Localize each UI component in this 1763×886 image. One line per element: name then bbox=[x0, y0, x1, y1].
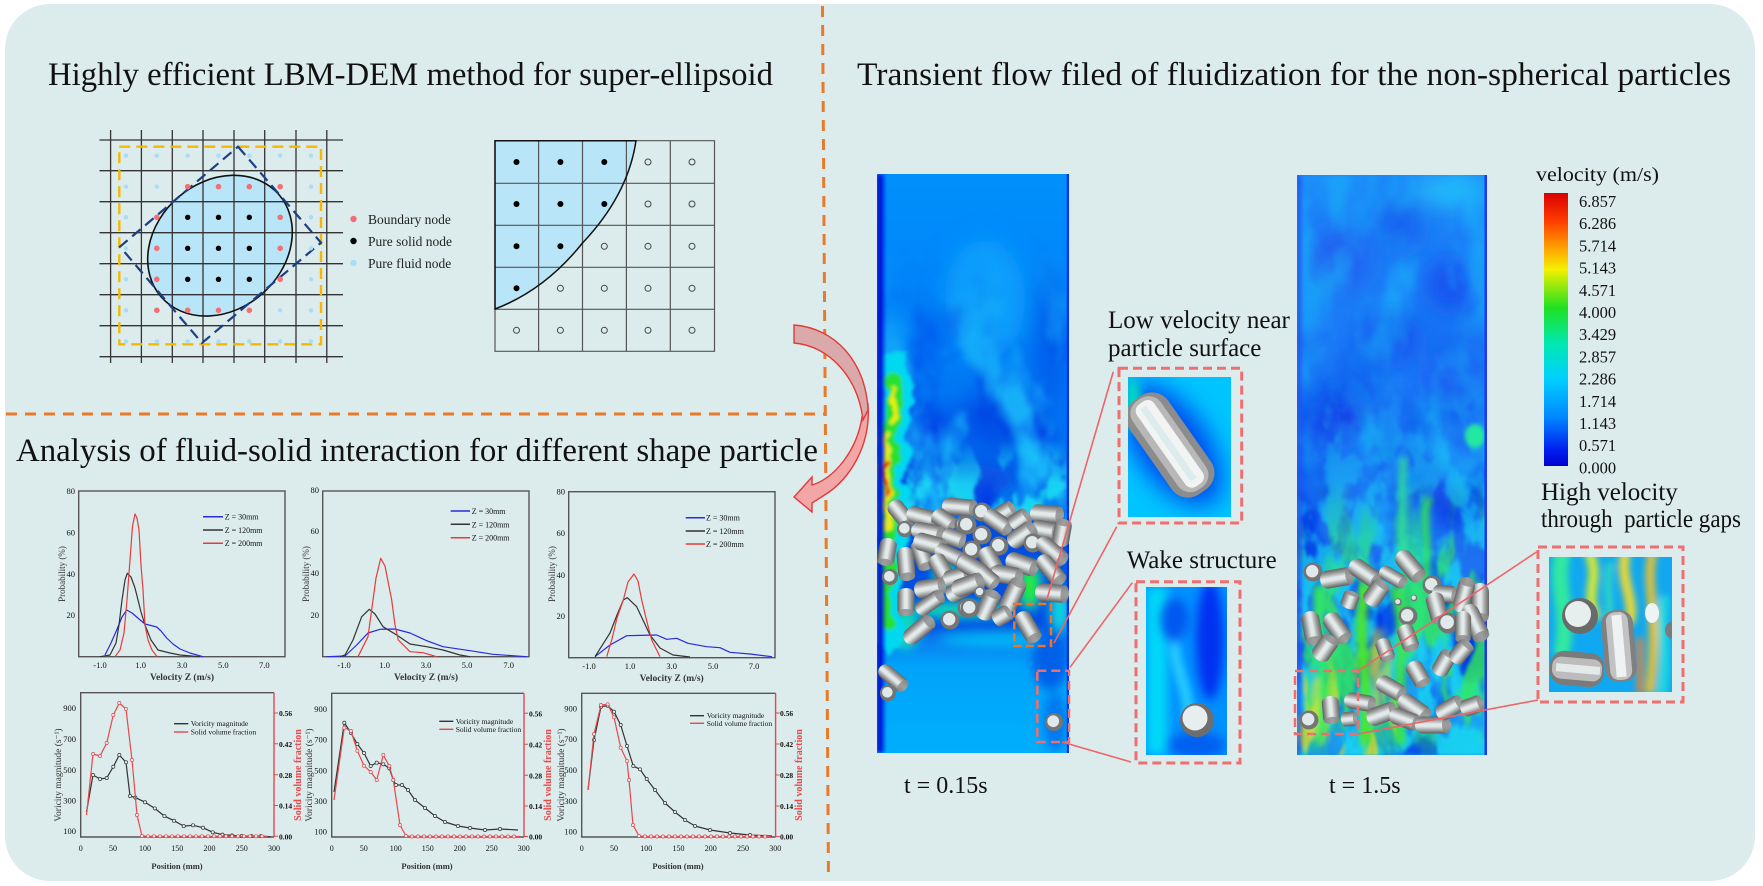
chart: vorticity and solid fraction c bbox=[556, 693, 805, 871]
title: fluid-solid analysis: Analysis of fluid-solid interaction for different shape particle bbox=[16, 433, 818, 469]
chart: vorticity and solid fraction a: 100 bbox=[63, 826, 76, 836]
colour scale: 4.000 bbox=[1579, 303, 1616, 322]
chart: vorticity and solid fraction a bbox=[53, 693, 304, 871]
chart: velocity distribution b: Z = 120mm bbox=[472, 520, 510, 530]
chart: vorticity and solid fraction a: 0.14 bbox=[279, 802, 292, 810]
chart: vorticity and solid fraction c: Solid volume fraction bbox=[707, 719, 772, 728]
colour scale: 5.714 bbox=[1579, 236, 1616, 256]
chart: velocity distribution a: Velocity Z (m/s) bbox=[150, 672, 214, 683]
chart: vorticity and solid fraction c: 150 bbox=[672, 844, 684, 853]
chart: vorticity and solid fraction b: 0 bbox=[330, 844, 334, 853]
chart: vorticity and solid fraction a: Solid volume fraction bbox=[191, 728, 256, 736]
t label left: t = 0.15s bbox=[904, 773, 988, 799]
chart: vorticity and solid fraction b: 100 bbox=[314, 826, 327, 836]
chart: vorticity and solid fraction b: 0.00 bbox=[529, 832, 542, 842]
chart: velocity distribution a: Z = 200mm bbox=[225, 539, 263, 548]
chart: vorticity and solid fraction a: 200 bbox=[204, 844, 216, 853]
chart: velocity distribution c: 60 bbox=[556, 528, 565, 538]
chart: velocity distribution c: Z = 120mm bbox=[706, 527, 745, 536]
chart: vorticity and solid fraction b bbox=[304, 693, 554, 871]
chart: vorticity and solid fraction a: 100 bbox=[139, 844, 151, 853]
colour scale bbox=[1536, 164, 1659, 478]
chart: vorticity and solid fraction c: 100 bbox=[564, 826, 577, 836]
chart: velocity distribution b: -1.0 bbox=[337, 660, 351, 670]
chart: vorticity and solid fraction b: Position (mm) bbox=[401, 861, 453, 871]
chart: vorticity and solid fraction c: Voricity magnitude bbox=[707, 711, 765, 720]
chart: vorticity and solid fraction c: 50 bbox=[610, 844, 618, 853]
chart: vorticity and solid fraction c: 100 bbox=[640, 844, 652, 853]
chart: vorticity and solid fraction c: 0.14 bbox=[780, 802, 793, 811]
chart: vorticity and solid fraction c: Voricity magnitude (s⁻¹) bbox=[556, 728, 567, 822]
chart: vorticity and solid fraction b: 250 bbox=[486, 844, 498, 853]
chart: velocity distribution c: 40 bbox=[556, 570, 565, 580]
chart: vorticity and solid fraction a: 0.00 bbox=[279, 832, 292, 842]
chart: velocity distribution b: 40 bbox=[310, 568, 319, 578]
diagram: lattice grid with super-ellipsoid bbox=[100, 130, 343, 363]
flow field at t = 0.15s bbox=[877, 174, 1069, 753]
chart: velocity distribution a: 1.0 bbox=[135, 660, 146, 670]
chart: vorticity and solid fraction c: 500 bbox=[564, 765, 577, 775]
callout: low velocity bbox=[1102, 307, 1291, 523]
t label right: t = 1.5s bbox=[1329, 773, 1401, 799]
connector lines bbox=[1047, 372, 1132, 762]
chart: velocity distribution c: 80 bbox=[556, 486, 565, 496]
connector lines: particle gaps bbox=[1358, 551, 1538, 734]
chart: vorticity and solid fraction c: 0.56 bbox=[780, 709, 793, 718]
chart: velocity distribution b: 80 bbox=[310, 485, 319, 495]
title: LBM-DEM method: Highly efficient LBM-DEM method for super-ellipsoid bbox=[48, 57, 773, 93]
chart: vorticity and solid fraction a: Voricity magnitude bbox=[191, 719, 249, 728]
legend: node types: Pure solid node bbox=[368, 234, 452, 249]
chart: velocity distribution b: 20 bbox=[310, 610, 319, 620]
red highlight box: wake bbox=[1037, 671, 1069, 742]
chart: velocity distribution c: Z = 200mm bbox=[706, 540, 745, 549]
chart: vorticity and solid fraction c: 0.42 bbox=[780, 740, 793, 749]
callout: wake structure bbox=[1127, 547, 1277, 763]
chart: vorticity and solid fraction c: 0.28 bbox=[780, 771, 793, 780]
red highlight box: particle gaps bbox=[1295, 671, 1358, 734]
flow field at t = 1.5s bbox=[1297, 175, 1490, 755]
colour scale: 6.286 bbox=[1579, 214, 1616, 233]
chart: vorticity and solid fraction a: 0.56 bbox=[279, 709, 292, 718]
chart: velocity distribution a: 7.0 bbox=[259, 660, 270, 670]
chart: velocity distribution c: Z = 30mm bbox=[706, 514, 741, 522]
chart: velocity distribution c: 20 bbox=[556, 611, 565, 621]
chart: vorticity and solid fraction a: 300 bbox=[63, 796, 76, 806]
chart: velocity distribution a: 80 bbox=[66, 486, 75, 496]
chart: vorticity and solid fraction b: Solid volume fraction bbox=[456, 725, 521, 734]
chart: velocity distribution b: 3.0 bbox=[421, 660, 431, 670]
chart: vorticity and solid fraction a: Position (mm) bbox=[151, 861, 203, 871]
chart: vorticity and solid fraction a: 0.42 bbox=[279, 740, 292, 749]
legend: node types: Pure fluid node bbox=[368, 256, 451, 271]
chart: velocity distribution a: -1.0 bbox=[93, 660, 107, 670]
chart: velocity distribution b: Probability (%) bbox=[301, 546, 311, 602]
chart: vorticity and solid fraction a: 300 bbox=[268, 844, 280, 853]
orange highlight box bbox=[1014, 604, 1051, 646]
particles at t = 1.5s bbox=[1300, 546, 1492, 734]
chart: vorticity and solid fraction a: 150 bbox=[171, 844, 183, 853]
colour scale: 1.143 bbox=[1579, 414, 1616, 433]
chart: velocity distribution a: 3.0 bbox=[177, 660, 187, 670]
callout: low velocity: particle surface bbox=[1108, 335, 1261, 362]
chart: vorticity and solid fraction b: 0.42 bbox=[529, 740, 542, 749]
chart: vorticity and solid fraction a: 500 bbox=[63, 765, 76, 775]
chart: vorticity and solid fraction a: 50 bbox=[109, 844, 117, 853]
chart: vorticity and solid fraction b: 300 bbox=[314, 796, 327, 806]
chart: velocity distribution c: 7.0 bbox=[749, 661, 759, 671]
chart: vorticity and solid fraction b: 100 bbox=[390, 844, 402, 853]
chart: velocity distribution a: Probability (%) bbox=[57, 546, 67, 602]
chart: velocity distribution a: Z = 120mm bbox=[225, 526, 263, 535]
chart: vorticity and solid fraction a: Voricity magnitude (s⁻¹) bbox=[53, 728, 64, 822]
chart: velocity distribution b bbox=[301, 485, 529, 683]
chart: vorticity and solid fraction c: 200 bbox=[705, 844, 717, 853]
arrow: curved red arrow bbox=[794, 325, 868, 512]
colour scale: velocity (m/s) bbox=[1536, 164, 1659, 186]
chart: vorticity and solid fraction b: Solid volume fraction bbox=[543, 729, 554, 821]
chart: velocity distribution a: Z = 30mm bbox=[225, 512, 259, 522]
chart: vorticity and solid fraction b: 0.28 bbox=[529, 771, 542, 780]
chart: velocity distribution c: Probability (%) bbox=[547, 546, 557, 602]
chart: velocity distribution b: 7.0 bbox=[503, 660, 514, 670]
chart: vorticity and solid fraction c: 0.00 bbox=[780, 832, 793, 842]
chart: vorticity and solid fraction c: 300 bbox=[769, 844, 781, 853]
colour scale: 4.571 bbox=[1579, 281, 1616, 300]
chart: vorticity and solid fraction b: 700 bbox=[314, 734, 327, 744]
colour scale: 1.714 bbox=[1579, 392, 1616, 411]
chart: velocity distribution c: 5.0 bbox=[708, 661, 718, 671]
chart: velocity distribution c: Velocity Z (m/s) bbox=[640, 673, 704, 684]
chart: velocity distribution c: -1.0 bbox=[582, 661, 596, 671]
chart: velocity distribution a: 40 bbox=[66, 569, 75, 579]
chart: velocity distribution b: Z = 200mm bbox=[472, 534, 510, 542]
chart: velocity distribution b: Velocity Z (m/s) bbox=[394, 672, 458, 683]
legend: node types bbox=[350, 212, 452, 271]
colour scale: 0.000 bbox=[1579, 458, 1616, 478]
colour scale: 2.286 bbox=[1579, 370, 1616, 388]
chart: velocity distribution a bbox=[57, 486, 285, 683]
chart: vorticity and solid fraction b: 0.56 bbox=[529, 709, 542, 718]
chart: vorticity and solid fraction a: 250 bbox=[236, 844, 248, 853]
chart: vorticity and solid fraction b: 200 bbox=[454, 844, 466, 853]
chart: vorticity and solid fraction c: Position (mm) bbox=[652, 861, 704, 871]
chart: vorticity and solid fraction c: 300 bbox=[564, 796, 577, 806]
chart: velocity distribution b: Z = 30mm bbox=[472, 507, 506, 516]
callout: wake structure: Wake structure bbox=[1127, 547, 1277, 574]
callout: high velocity: through particle gaps bbox=[1541, 506, 1741, 533]
chart: velocity distribution b: 5.0 bbox=[462, 660, 472, 670]
callout: low velocity: Low velocity near bbox=[1108, 307, 1291, 334]
chart: vorticity and solid fraction c: 250 bbox=[737, 844, 749, 853]
colour scale: 6.857 bbox=[1579, 192, 1616, 211]
colour scale: 5.143 bbox=[1579, 258, 1616, 278]
diagram: boundary cell grid bbox=[495, 141, 714, 351]
chart: velocity distribution c bbox=[547, 486, 775, 684]
chart: velocity distribution b: 1.0 bbox=[379, 660, 390, 670]
chart: vorticity and solid fraction a: Solid volume fraction bbox=[293, 729, 304, 821]
chart: vorticity and solid fraction b: 0.14 bbox=[529, 802, 542, 811]
chart: vorticity and solid fraction c: 700 bbox=[564, 734, 577, 744]
title: transient flow field: Transient flow filed of fluidization for the non-spherical particles bbox=[857, 57, 1731, 93]
chart: velocity distribution c: 1.0 bbox=[625, 661, 635, 671]
chart: velocity distribution c: 3.0 bbox=[666, 661, 677, 671]
chart: vorticity and solid fraction c: 900 bbox=[564, 704, 577, 714]
dashed divider lines bbox=[6, 6, 828, 880]
chart: vorticity and solid fraction a: 0 bbox=[79, 844, 83, 853]
chart: vorticity and solid fraction b: Voricity magnitude bbox=[456, 717, 514, 726]
callout: high velocity: High velocity bbox=[1541, 479, 1678, 506]
chart: vorticity and solid fraction a: 700 bbox=[63, 734, 76, 744]
chart: velocity distribution a: 60 bbox=[66, 528, 75, 538]
colour scale: 3.429 bbox=[1579, 325, 1616, 344]
particles at t = 0.15s bbox=[875, 497, 1073, 731]
legend: node types: Boundary node bbox=[368, 212, 451, 227]
chart: vorticity and solid fraction b: 50 bbox=[360, 844, 368, 853]
chart: vorticity and solid fraction b: 900 bbox=[314, 704, 327, 714]
colour scale: 2.857 bbox=[1579, 348, 1616, 366]
chart: vorticity and solid fraction c: Solid volume fraction bbox=[794, 729, 805, 821]
chart: velocity distribution a: 20 bbox=[66, 610, 75, 620]
callout: high velocity bbox=[1538, 479, 1741, 702]
chart: vorticity and solid fraction a: 900 bbox=[63, 703, 76, 713]
chart: vorticity and solid fraction b: 300 bbox=[518, 844, 530, 853]
chart: vorticity and solid fraction c: 0 bbox=[580, 844, 584, 853]
chart: vorticity and solid fraction b: Voricity magnitude (s⁻¹) bbox=[304, 728, 315, 822]
colour scale: 0.571 bbox=[1579, 436, 1616, 455]
chart: velocity distribution b: 60 bbox=[310, 526, 319, 536]
chart: velocity distribution a: 5.0 bbox=[218, 660, 229, 670]
chart: vorticity and solid fraction b: 150 bbox=[422, 844, 434, 853]
chart: vorticity and solid fraction a: 0.28 bbox=[279, 771, 292, 780]
chart: vorticity and solid fraction b: 500 bbox=[314, 766, 327, 776]
